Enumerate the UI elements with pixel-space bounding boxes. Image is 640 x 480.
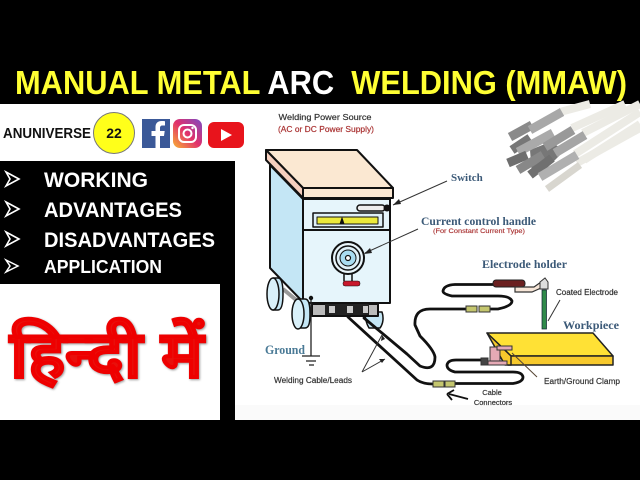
label: electrode holder: Electrode holder (482, 259, 567, 271)
label: power source: Welding Power Source (278, 112, 372, 122)
episode badge (94, 112, 134, 154)
cable connector: lower (433, 381, 455, 387)
welding machine (266, 150, 393, 329)
label: current control handle: (For Constant Current Type) (433, 228, 525, 235)
list item: working: WORKING (44, 169, 148, 192)
earth clamp (481, 346, 512, 365)
side panel (270, 165, 303, 302)
output terminals (312, 304, 378, 316)
top black title band (0, 0, 640, 104)
black divider column (220, 284, 235, 420)
coated electrode (542, 290, 546, 329)
front panel (303, 199, 390, 303)
workpiece (487, 333, 613, 365)
label: welding cable leads (274, 335, 385, 385)
meter (313, 213, 383, 227)
label: coated electrode: Coated Electrode (556, 288, 619, 297)
lid (266, 150, 393, 188)
panel: topics list (0, 161, 235, 284)
list item: application: APPLICATION (44, 257, 162, 277)
label: power source: (AC or DC Power Supply) (278, 124, 374, 134)
list item: disadvantages: DISADVANTAGES (44, 229, 215, 252)
label: power source (278, 112, 374, 134)
channel name: ANUNIVERSE (3, 126, 91, 142)
hindi heading: हिन्दी में (8, 317, 205, 391)
label: earth clamp: Earth/Ground Clamp (544, 377, 621, 386)
episode badge: 22 (106, 125, 122, 141)
label: switch: Switch (451, 172, 483, 184)
icon: facebook (142, 119, 170, 148)
list item: advantages: ADVANTAGES (44, 199, 182, 222)
welding cables (348, 284, 523, 384)
switch (357, 205, 390, 211)
label: cable connectors (447, 388, 512, 407)
label: current control handle: Current control handle (421, 216, 536, 228)
photo: electrode rods (508, 104, 640, 189)
label: switch (393, 172, 483, 205)
label: earth clamp (512, 353, 621, 386)
cable connector: upper (466, 306, 490, 312)
wheels (267, 278, 310, 329)
icon: instagram (173, 119, 202, 148)
label: current control handle (364, 216, 536, 254)
label: cable connectors: Cable (482, 388, 502, 397)
icon: youtube (208, 122, 244, 148)
control knob (332, 242, 364, 286)
bottom black band (0, 420, 640, 480)
ground symbol and label (265, 296, 320, 365)
label: coated electrode (548, 288, 619, 321)
label: workpiece: Workpiece (563, 320, 619, 332)
right wheel (365, 312, 383, 328)
faint lower background strip (235, 405, 640, 420)
label: cable connectors: Connectors (474, 398, 512, 407)
title: MANUAL METAL ARC WELDING (MMAW) (15, 64, 627, 101)
ground symbol and label: Ground (265, 342, 306, 357)
electrode holder (493, 278, 548, 292)
label: welding cable leads: Welding Cable/Leads (274, 376, 352, 385)
